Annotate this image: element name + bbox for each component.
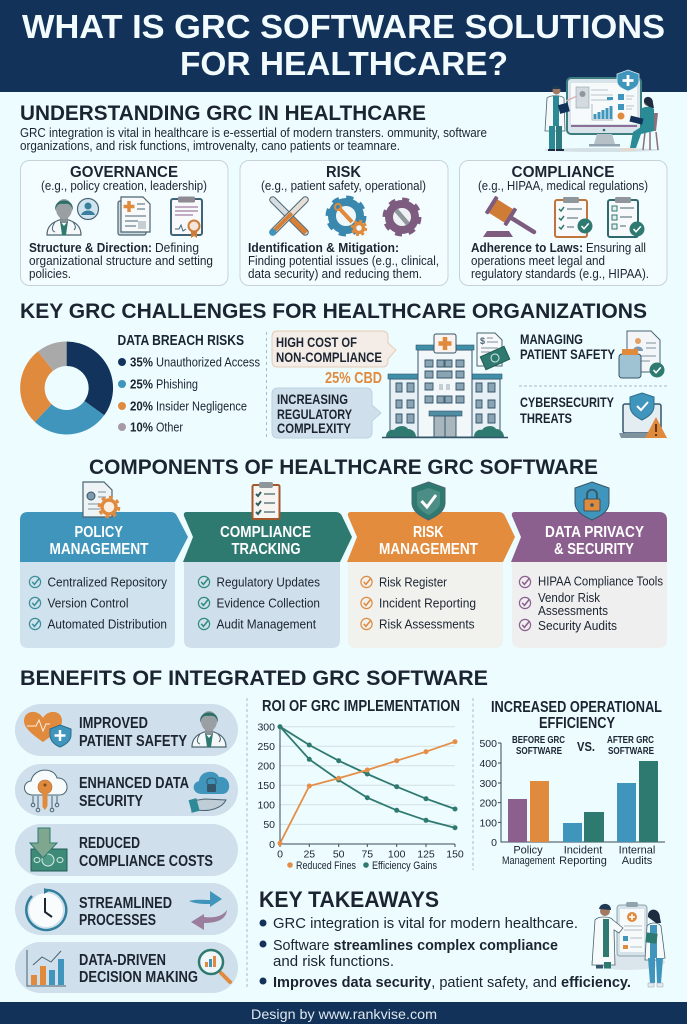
icon: down arrow to money [30,828,67,871]
icon: process arrows [189,891,227,930]
panel: risk management: MANAGEMENT [379,541,478,558]
chart: increased operational efficiency [479,699,665,867]
chart: ROI of GRC implementation: 25 [303,848,315,860]
heading: risk: RISK [326,164,362,181]
checklist: policy management: Version Control [48,596,128,610]
benefit: data-driven decision making [15,942,238,993]
chart: ROI of GRC implementation: 150 [257,780,275,792]
takeaways list: and risk functions. [273,954,394,970]
icon: purple gear with wrench [385,200,419,234]
checklist: compliance tracking: Regulatory Updates [216,574,320,590]
chart: ROI of GRC implementation: 100 [388,848,406,860]
panel: risk management [347,512,515,648]
legend: data breach risks: Other [156,420,184,434]
panel: policy management [20,512,188,648]
title: FOR HEALTHCARE? [180,45,508,82]
checklist: compliance tracking: Evidence Collection [216,596,320,610]
chart: ROI of GRC implementation: 0 [269,839,275,851]
title [22,8,665,82]
checklist: data privacy: Vendor Risk [538,590,601,605]
icon: gavel [483,196,534,237]
risk subtitle: (e.g., patient safety, operational) [261,179,426,193]
chart: increased operational efficiency: 300 [479,778,497,790]
heading: key takeaways: KEY TAKEAWAYS [259,887,439,912]
risk description: data security) and reducing them. [248,267,422,281]
checklist: data privacy: Security Audits [538,618,617,633]
benefit: enhanced data security [15,764,238,816]
compliance description [471,241,649,281]
chart: increased operational efficiency: Management [502,855,555,867]
chart: increased operational efficiency: SOFTWARE [516,745,562,757]
icon: certificate clipboard [171,196,202,238]
chart: ROI of GRC implementation: 50 [333,848,345,860]
chart: increased operational efficiency: Reporting [559,855,607,867]
icon: medical document [118,197,150,235]
icon: compliance clipboard [252,482,280,519]
heading: components: COMPONENTS OF HEALTHCARE GRC SOFTWARE [89,456,598,479]
panel: compliance tracking: TRACKING [232,541,300,558]
governance description: Defining [155,241,199,255]
label: cybersecurity threats [520,394,615,426]
label: cybersecurity threats: CYBERSECURITY [520,394,615,410]
icon: teal checklist clipboard [608,197,644,237]
chart: increased operational efficiency: Internal [619,844,655,856]
panel: data privacy and security: & SECURITY [554,541,635,558]
chart: ROI of GRC implementation: 75 [361,848,373,860]
chart: increased operational efficiency: 100 [479,817,497,829]
governance description: Structure & Direction: [29,241,152,255]
icon: invoice with money [477,333,510,370]
chart: increased operational efficiency: 0 [491,837,497,849]
icon: clock [26,888,66,930]
stat: 25% CBD: 25% CBD [325,370,382,387]
governance subtitle: (e.g., policy creation, leadership) [41,179,207,193]
callout: increasing regulatory complexity: REGULATORY [277,406,353,422]
chart: increased operational efficiency: 400 [479,758,497,770]
legend: data breach risks: 10% [130,420,153,434]
legend: data breach risks: 35% [130,354,153,370]
compliance description: Ensuring all [586,241,646,255]
checklist: risk management: Incident Reporting [379,596,476,610]
icon: cloud with key [24,770,67,812]
legend: data breach risks: 20% [130,398,153,414]
callout: high cost of non-compliance: NON-COMPLIANCE [276,349,382,365]
icon: policy document with gear [83,482,119,517]
header banner [0,0,687,92]
legend: data breach risks: 25% [130,376,153,392]
panel: governance [20,160,228,286]
chart: ROI of GRC implementation: 250 [257,741,275,753]
chart: ROI of GRC implementation [257,698,464,872]
panel: compliance [460,160,667,286]
compliance description: regulatory standards (e.g., HIPAA). [471,267,649,281]
compliance subtitle: (e.g., HIPAA, medical regulations) [478,179,648,193]
icon: crossed thermometers [268,195,310,237]
heading: understanding GRC: UNDERSTANDING GRC IN HEALTHCARE [20,102,426,125]
label: cybersecurity threats: THREATS [520,410,572,426]
chart: increased operational efficiency: SOFTWARE [608,745,654,757]
chart: ROI of GRC implementation: ROI OF GRC IMPLEMENTATION [262,698,460,715]
title: WHAT IS GRC SOFTWARE SOLUTIONS [22,8,665,45]
icon: orange checklist clipboard [555,197,592,237]
benefit: reduced compliance costs: COMPLIANCE COSTS [79,853,213,870]
checklist: data privacy [519,574,663,633]
chart: ROI of GRC implementation: 125 [417,848,435,860]
compliance description: operations meet legal and [471,254,605,268]
checklist: policy management [29,574,168,632]
donut chart: data breach risks [20,342,113,434]
checklist: policy management: Automated Distribution [48,616,167,632]
illustration: doctor and nurse at monitor [544,70,660,152]
benefit: improved patient safety: PATIENT SAFETY [79,733,188,750]
panel: data privacy and security [511,512,667,648]
panel: compliance tracking [183,512,352,648]
chart: increased operational efficiency: BEFORE GRC [512,734,565,746]
callout: increasing regulatory complexity [272,388,381,438]
icon: patient record with vial [619,331,664,378]
heading: governance: GOVERNANCE [70,164,178,181]
panel: data privacy and security: DATA PRIVACY [545,524,645,541]
panel: risk management: RISK [413,524,444,541]
checklist: risk management [361,574,476,632]
callout: increasing regulatory complexity: INCREASING [277,391,348,407]
intro paragraph: organizations, and risk functions, imtrovenalty, cano patients or teamnare. [20,139,400,153]
icon: teal shield with check [412,482,445,520]
chart: ROI of GRC implementation: 100 [257,800,275,812]
checklist: compliance tracking: Audit Management [216,616,316,632]
checklist: compliance tracking [198,574,320,632]
icon: invoice with money: $ [480,336,485,346]
checklist: policy management: Centralized Repository [48,574,168,590]
panel: compliance tracking: COMPLIANCE [220,524,311,541]
governance description: organizational structure and setting [29,254,213,268]
checklist: data privacy: Assessments [538,603,608,618]
icon: doctor with speech bubble [47,198,98,235]
panel: risk [240,160,448,286]
benefit: enhanced data security: SECURITY [79,793,144,810]
risk description [248,241,439,281]
chart: ROI of GRC implementation: 50 [263,819,275,831]
benefit: reduced compliance costs [15,824,238,876]
benefit: streamlined processes: PROCESSES [79,912,156,929]
chart: increased operational efficiency: EFFICIENCY [539,715,616,732]
benefit: reduced compliance costs: REDUCED [79,835,140,852]
chart: ROI of GRC implementation: 150 [446,848,464,860]
label: managing patient safety: MANAGING [520,331,583,347]
chart: increased operational efficiency: 500 [479,738,497,750]
icon: doctor [192,711,226,747]
label: managing patient safety: PATIENT SAFETY [520,346,616,362]
legend: data breach risks [118,333,260,434]
legend: data breach risks: Unauthorized Access [156,354,260,370]
chart: ROI of GRC implementation: 300 [257,722,275,734]
takeaways list: Improves data security, patient safety, and efficiency. [273,975,631,991]
intro paragraph [20,126,487,153]
illustration: doctors with clipboard [591,902,665,987]
icon: hospital building [382,334,508,438]
icon: blue shield with padlock [575,482,609,520]
callout: high cost of non-compliance: HIGH COST OF [276,334,357,350]
benefit: streamlined processes: STREAMLINED [79,895,172,912]
benefit: streamlined processes [15,883,238,935]
benefit: enhanced data security: ENHANCED DATA [79,775,189,792]
risk description: Finding potential issues (e.g., clinical, [248,254,439,268]
checklist: risk management: Risk Register [379,574,448,590]
checklist: data privacy: HIPAA Compliance Tools [538,574,663,588]
chart: increased operational efficiency: Incident [564,844,602,856]
takeaways list [260,916,631,991]
footer bar [0,1002,687,1024]
footer credit: Design by www.rankvise.com [251,1006,437,1022]
takeaways list: GRC integration is vital for modern healthcare. [273,916,578,932]
callout: increasing regulatory complexity: COMPLEXITY [277,420,352,436]
icon: magnifier with chart [199,950,230,982]
icon: cloud lock and hand [189,772,229,813]
intro paragraph: GRC integration is vital in healthcare is e-essertial of modern transters. ommunity, software [20,126,487,140]
panel: policy management: MANAGEMENT [50,541,149,558]
chart: ROI of GRC implementation: 200 [257,760,275,772]
governance description: policies. [29,267,71,281]
chart: ROI of GRC implementation: Efficiency Gains [372,860,437,872]
takeaways list: Software streamlines complex compliance [273,938,558,954]
icon: heart with shield [24,712,71,747]
panel: policy management: POLICY [74,524,124,541]
benefit: improved patient safety [15,704,238,756]
heading: compliance: COMPLIANCE [512,164,614,181]
legend: data breach risks: DATA BREACH RISKS [118,333,244,349]
icon: bar chart with trend line [27,950,66,986]
benefit: data-driven decision making: DATA-DRIVEN [79,952,166,969]
benefit: improved patient safety: IMPROVED [79,715,148,732]
label: managing patient safety [520,331,616,362]
risk description: Identification & Mitigation: [248,241,399,255]
chart: ROI of GRC implementation: 0 [277,848,283,860]
icon: laptop with shield and warning [619,393,667,438]
icon: blue gear with wrench [328,198,366,235]
heading: benefits: BENEFITS OF INTEGRATED GRC SOFTWARE [20,667,488,690]
checklist: risk management: Risk Assessments [379,616,474,632]
chart: increased operational efficiency: Audits [622,855,653,867]
compliance description: Adherence to Laws: [471,241,583,255]
chart: increased operational efficiency: VS. [577,739,595,754]
chart: increased operational efficiency: Policy [513,844,543,856]
chart: increased operational efficiency: 200 [479,798,497,810]
chart: increased operational efficiency: AFTER GRC [607,734,654,746]
benefit: data-driven decision making: DECISION MAKING [79,969,198,986]
chart: ROI of GRC implementation: Reduced Fines [296,860,356,872]
legend: data breach risks: Phishing [156,376,198,392]
governance description [29,241,213,281]
heading: key challenges: KEY GRC CHALLENGES FOR HEALTHCARE ORGANIZATIONS [20,300,647,323]
legend: data breach risks: Insider Negligence [156,398,247,414]
callout: high cost of non-compliance [272,331,396,367]
